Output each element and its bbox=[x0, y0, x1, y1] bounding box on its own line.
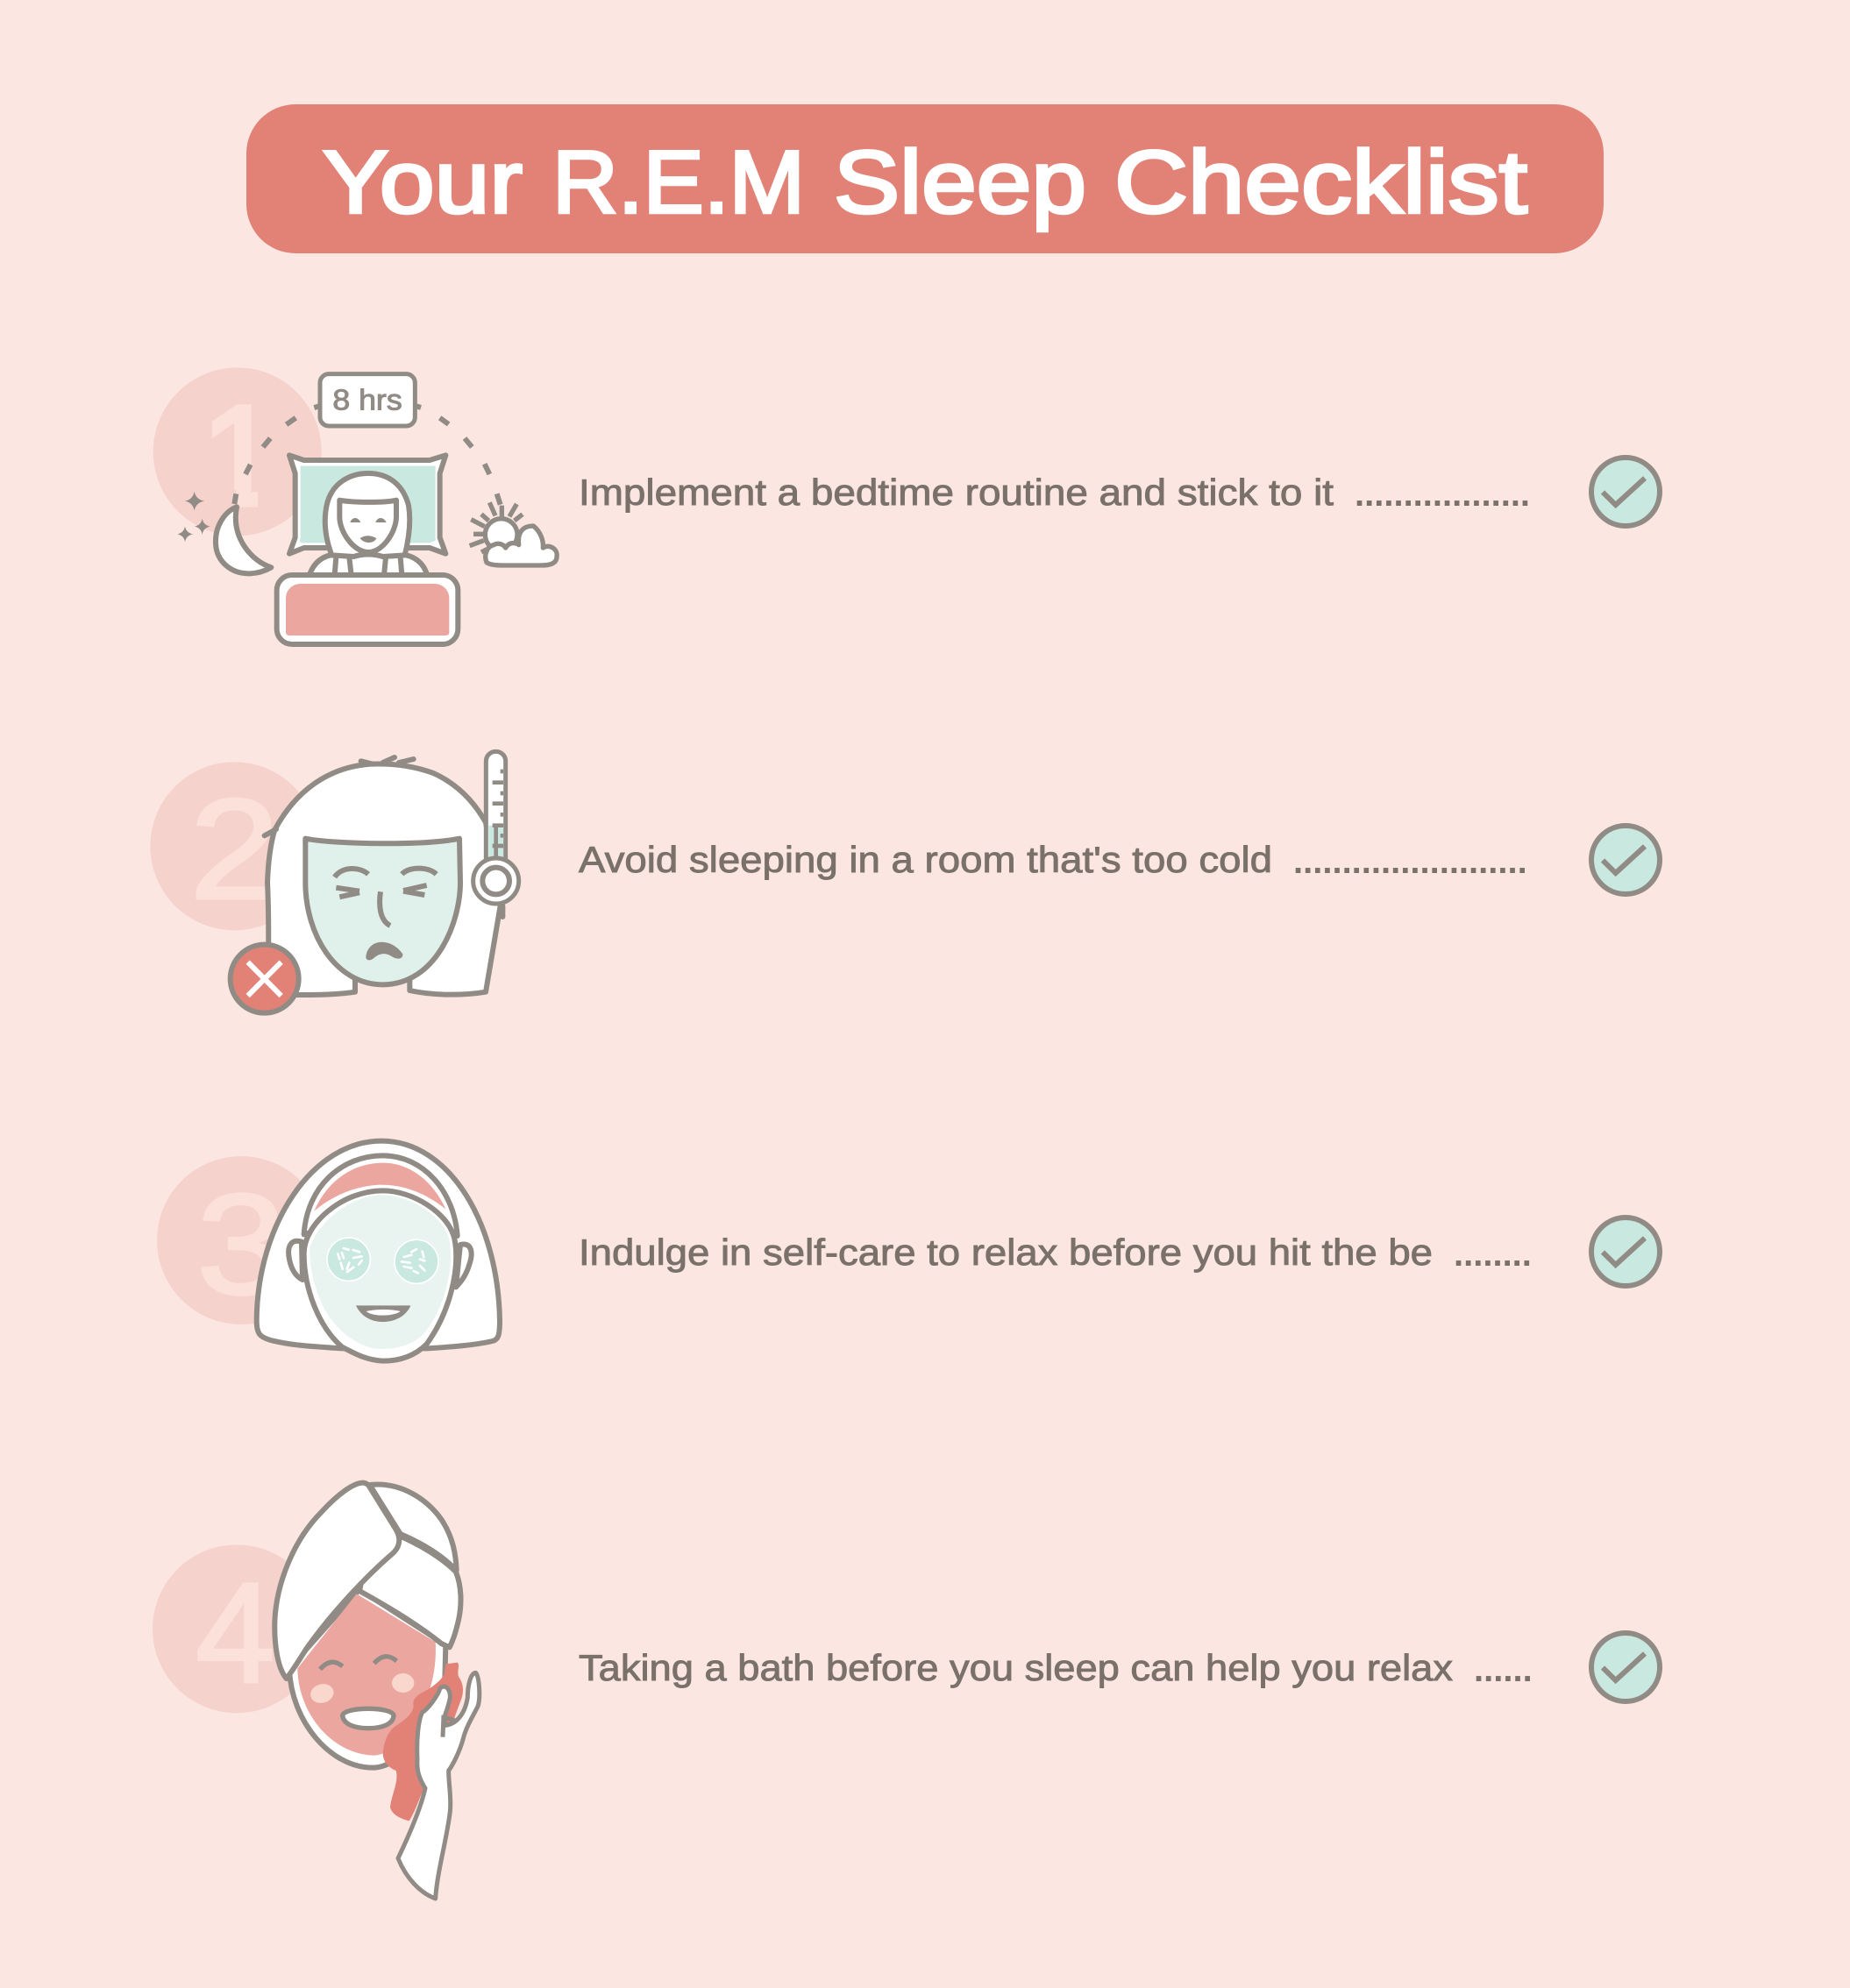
title text: R.E.M bbox=[552, 133, 805, 231]
smile bbox=[356, 1305, 410, 1322]
headband bbox=[304, 1155, 458, 1236]
panel: step 2 text bbox=[579, 839, 1527, 881]
hair tufts bbox=[265, 757, 502, 917]
number 2: 2 bbox=[189, 769, 280, 929]
ears bbox=[288, 1241, 472, 1287]
icon: check 1 bbox=[1591, 458, 1660, 526]
number 4: 4 bbox=[196, 1552, 275, 1713]
dotted leader 3: ........ bbox=[1454, 1235, 1532, 1274]
number 3: 3 bbox=[196, 1164, 287, 1324]
panel: step 1 text: Implement a bedtime routine and stick to it bbox=[579, 472, 1334, 513]
panel: step 4 text: Taking a bath before you sleep can help you relax bbox=[579, 1647, 1453, 1688]
8 hrs badge bbox=[320, 374, 415, 426]
dashed time arc bbox=[234, 406, 501, 505]
dotted leader 1: .................. bbox=[1355, 475, 1530, 514]
title text: Your bbox=[323, 133, 523, 231]
panel: step 3 text: Indulge in self-care to relax before you hit the be bbox=[579, 1232, 1433, 1273]
title text bbox=[323, 133, 1527, 231]
icon: thermometer bbox=[473, 751, 519, 904]
panel: step 1 illustration bbox=[153, 367, 557, 644]
icon: check 4 bbox=[1591, 1633, 1660, 1701]
towel turban bbox=[274, 1483, 461, 1679]
icon: sun and cloud bbox=[470, 502, 557, 565]
cold face bbox=[305, 839, 460, 984]
hair bbox=[257, 1141, 500, 1348]
icon: red cross badge bbox=[231, 945, 299, 1013]
cucumber eyes bbox=[327, 1238, 438, 1283]
icon: check 3 bbox=[1591, 1218, 1660, 1286]
title banner bbox=[246, 104, 1604, 253]
woman in bed bbox=[310, 473, 427, 576]
mask face bbox=[304, 1190, 456, 1361]
blanket bbox=[277, 575, 458, 644]
dotted leader 4: ...... bbox=[1474, 1651, 1533, 1689]
icon: moon and stars bbox=[177, 492, 271, 573]
pillow bbox=[289, 455, 445, 554]
panel: step 3 illustration bbox=[157, 1141, 500, 1361]
title text: Checklist bbox=[1114, 133, 1527, 231]
hair bbox=[267, 763, 501, 995]
title text: Sleep bbox=[834, 133, 1086, 231]
dotted leader 2: ........................ bbox=[1293, 842, 1527, 881]
panel: step 2 text: Avoid sleeping in a room that's too cold bbox=[579, 839, 1272, 880]
panel: step 4 illustration bbox=[153, 1483, 480, 1899]
hand bbox=[398, 1672, 480, 1899]
8 hrs badge: 8 hrs bbox=[332, 385, 402, 417]
panel: step 2 illustration bbox=[150, 751, 519, 1013]
icon: check 2 bbox=[1591, 826, 1660, 894]
number 1: 1 bbox=[201, 375, 280, 536]
washcloth bbox=[383, 1663, 463, 1821]
face bbox=[289, 1589, 445, 1768]
